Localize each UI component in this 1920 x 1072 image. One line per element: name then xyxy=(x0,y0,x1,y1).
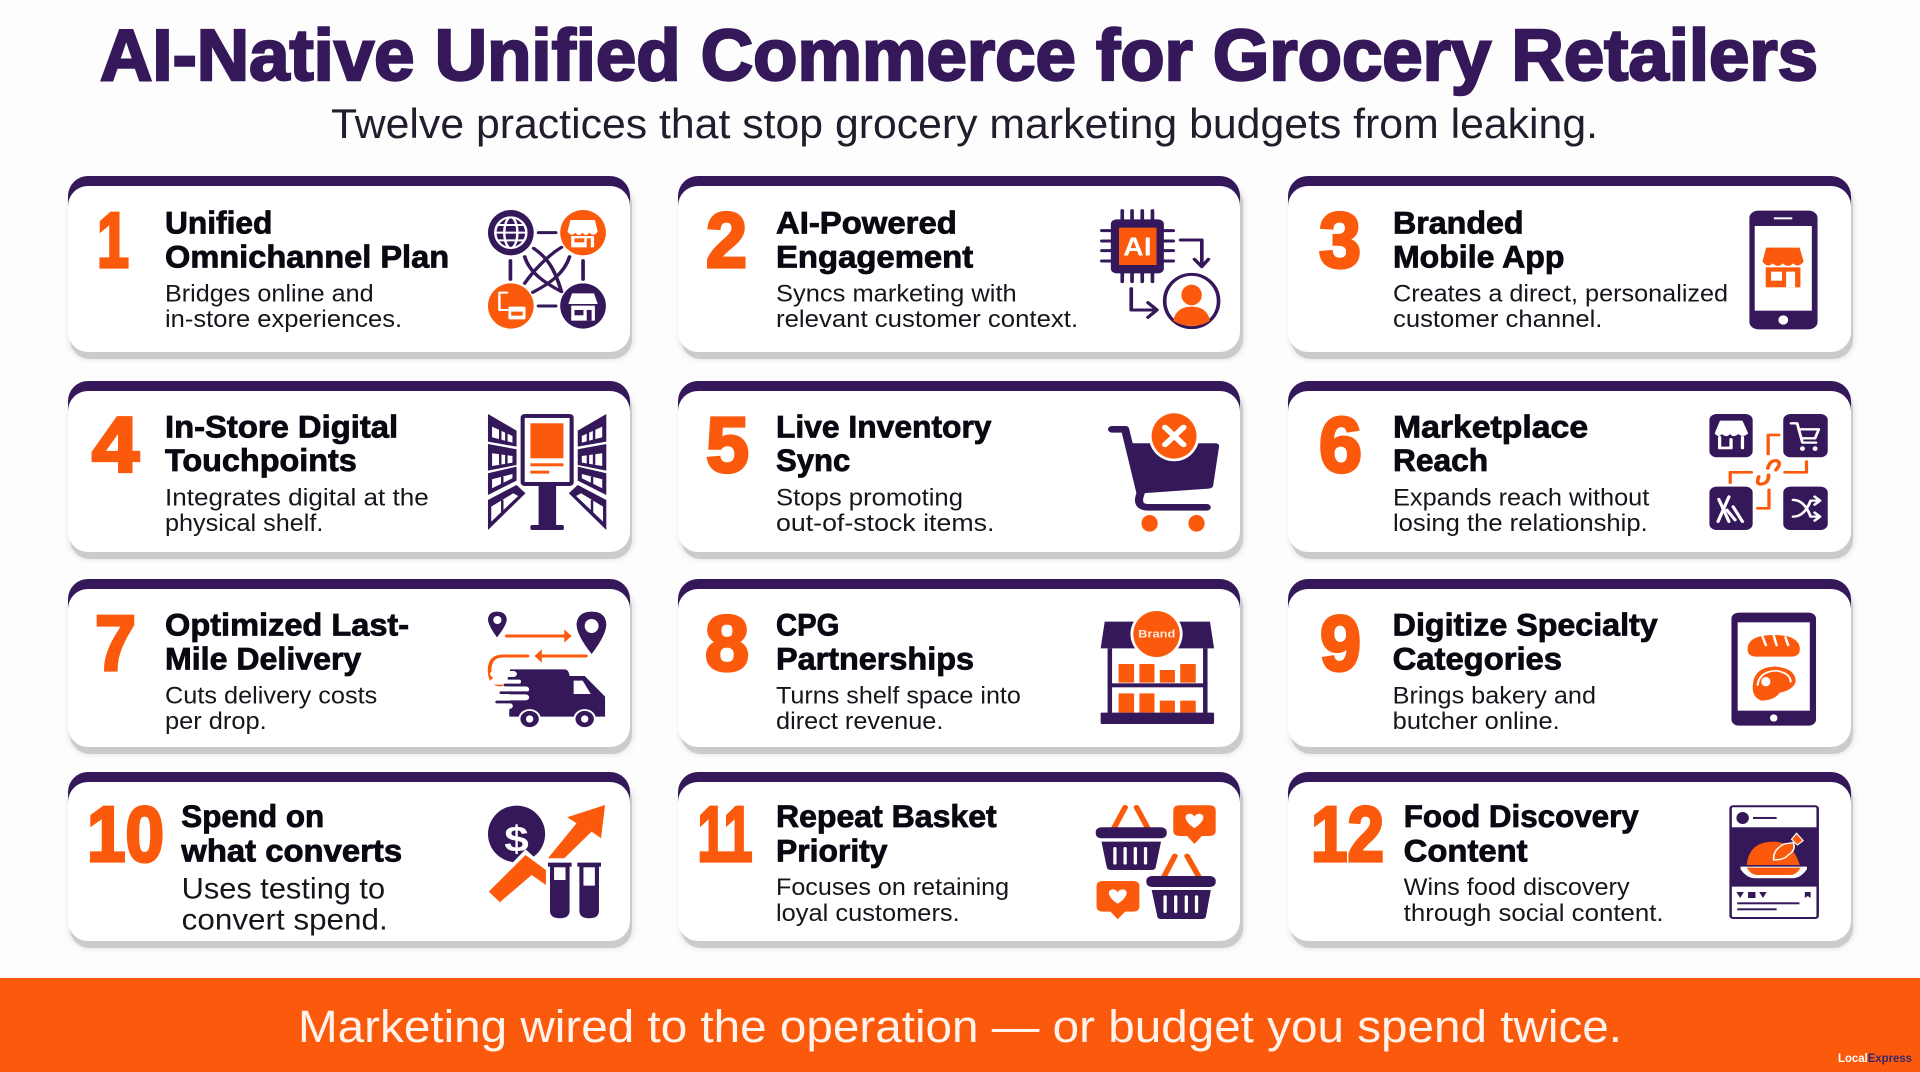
icon: growth arrows and test tubes xyxy=(485,805,605,918)
panel: card 4 in-store digital touchpoints xyxy=(68,381,633,559)
heading: Mobile App xyxy=(1393,238,1564,274)
description xyxy=(1393,280,1728,333)
description: Wins food discovery xyxy=(1404,874,1630,901)
description: physical shelf. xyxy=(165,510,323,537)
heading xyxy=(1404,798,1639,868)
heading: Reach xyxy=(1393,442,1488,478)
icon: marketplace links xyxy=(1709,414,1828,530)
heading: what converts xyxy=(180,832,402,868)
description xyxy=(1393,484,1649,537)
number 6: 6 xyxy=(1319,401,1362,489)
description: Syncs marketing with xyxy=(776,280,1017,307)
heading xyxy=(165,606,409,676)
icon: connected channels network xyxy=(488,210,606,329)
heading: Spend on xyxy=(181,798,324,834)
description xyxy=(776,280,1078,333)
description: Cuts delivery costs xyxy=(165,682,377,709)
heading: Omnichannel Plan xyxy=(165,238,449,274)
panel: card 5 live inventory sync xyxy=(678,381,1244,559)
description: in-store experiences. xyxy=(165,306,402,333)
description: Creates a direct, personalized xyxy=(1393,280,1728,307)
heading xyxy=(1393,204,1564,274)
description xyxy=(1393,682,1596,735)
heading xyxy=(776,798,997,868)
heading xyxy=(180,798,402,868)
number 2: 2 xyxy=(706,196,747,284)
heading xyxy=(165,204,449,274)
number 10: 10 xyxy=(87,790,164,878)
description: direct revenue. xyxy=(776,708,943,735)
heading: Branded xyxy=(1393,204,1524,240)
description: loyal customers. xyxy=(776,900,960,927)
panel: card 11 repeat basket priority xyxy=(678,772,1244,948)
description: Stops promoting xyxy=(776,484,963,511)
heading: Marketplace xyxy=(1393,408,1588,444)
icon: delivery van and route xyxy=(488,612,606,728)
heading xyxy=(776,204,974,274)
description: butcher online. xyxy=(1393,708,1560,735)
heading xyxy=(776,408,992,478)
heading: Sync xyxy=(776,442,850,478)
heading xyxy=(165,408,398,478)
description xyxy=(182,872,388,936)
description: losing the relationship. xyxy=(1393,510,1648,537)
description: Focuses on retaining xyxy=(776,874,1009,901)
panel: card 6 marketplace reach xyxy=(1288,381,1854,559)
number 12: 12 xyxy=(1311,790,1384,878)
heading xyxy=(1393,606,1658,676)
panel: card 1 unified omnichannel plan xyxy=(68,176,633,359)
description xyxy=(165,484,429,537)
number 3: 3 xyxy=(1319,196,1361,284)
title: AI-Native Unified Commerce for Grocery Retailers xyxy=(100,16,1818,96)
heading: In-Store Digital xyxy=(165,408,398,444)
icon: ai chip to customer: AI xyxy=(1123,233,1152,262)
icon: ai chip to customer xyxy=(1102,211,1219,328)
heading: Digitize Specialty xyxy=(1393,606,1658,642)
heading xyxy=(776,606,974,676)
description: customer channel. xyxy=(1393,306,1602,333)
description xyxy=(776,484,994,537)
description: Bridges online and xyxy=(165,280,374,307)
heading: Touchpoints xyxy=(165,442,357,478)
description xyxy=(165,682,377,735)
icon: branded store shelf xyxy=(1101,609,1214,724)
number 5: 5 xyxy=(706,401,749,489)
description: Uses testing to xyxy=(182,872,385,905)
heading: Unified xyxy=(165,204,272,240)
heading: CPG xyxy=(776,606,839,642)
logo: LocalExpress: LocalExpress xyxy=(1838,1053,1912,1065)
heading: Optimized Last- xyxy=(165,606,409,642)
heading: Categories xyxy=(1393,640,1562,676)
panel: card 2 ai-powered engagement xyxy=(678,176,1244,359)
description xyxy=(776,682,1021,735)
icon: mobile phone with store xyxy=(1749,211,1818,329)
icon: shopping cart out of stock xyxy=(1112,411,1219,532)
description xyxy=(1404,874,1664,927)
icon: digital kiosk between shelves xyxy=(488,414,606,530)
heading: Live Inventory xyxy=(776,408,992,444)
heading: Content xyxy=(1404,832,1528,868)
description: out-of-stock items. xyxy=(776,510,994,537)
number 9: 9 xyxy=(1320,599,1361,687)
number 4: 4 xyxy=(92,401,139,489)
footer banner xyxy=(0,978,1920,1072)
heading: Mile Delivery xyxy=(165,640,362,676)
description: per drop. xyxy=(165,708,267,735)
heading: Engagement xyxy=(776,238,974,274)
description: through social content. xyxy=(1404,900,1664,927)
number 8: 8 xyxy=(705,599,749,687)
description xyxy=(165,280,402,333)
icon: growth arrows and test tubes: $ xyxy=(504,819,529,860)
description: Brings bakery and xyxy=(1393,682,1596,709)
panel: card 8 cpg partnerships xyxy=(678,579,1244,754)
panel: card 10 spend on what converts xyxy=(68,772,633,948)
description: convert spend. xyxy=(182,903,388,936)
number 7: 7 xyxy=(95,599,136,687)
panel: card 3 branded mobile app xyxy=(1288,176,1854,359)
panel: card 12 food discovery content xyxy=(1288,772,1854,948)
heading: AI-Powered xyxy=(776,204,957,240)
description: Integrates digital at the xyxy=(165,484,429,511)
description xyxy=(776,874,1009,927)
heading xyxy=(1393,408,1588,478)
heading: Partnerships xyxy=(776,640,974,676)
footer tagline: Marketing wired to the operation — or budget you spend twice. xyxy=(298,1001,1622,1052)
icon: social post with roast turkey xyxy=(1731,806,1818,918)
heading: Food Discovery xyxy=(1404,798,1639,834)
icon: branded store shelf: Brand xyxy=(1138,628,1175,640)
subtitle: Twelve practices that stop grocery marketing budgets from leaking. xyxy=(331,100,1598,147)
icon: tablet with bread and meat xyxy=(1731,613,1816,726)
panel: card 7 optimized last-mile delivery xyxy=(68,579,633,754)
description: Turns shelf space into xyxy=(776,682,1021,709)
panel: card 9 digitize specialty categories xyxy=(1288,579,1854,754)
description: Expands reach without xyxy=(1393,484,1649,511)
number 11: 11 xyxy=(698,790,752,878)
icon: baskets and hearts xyxy=(1096,805,1216,919)
heading: Priority xyxy=(776,832,888,868)
number 1: 1 xyxy=(97,196,129,284)
description: relevant customer context. xyxy=(776,306,1078,333)
heading: Repeat Basket xyxy=(776,798,997,834)
